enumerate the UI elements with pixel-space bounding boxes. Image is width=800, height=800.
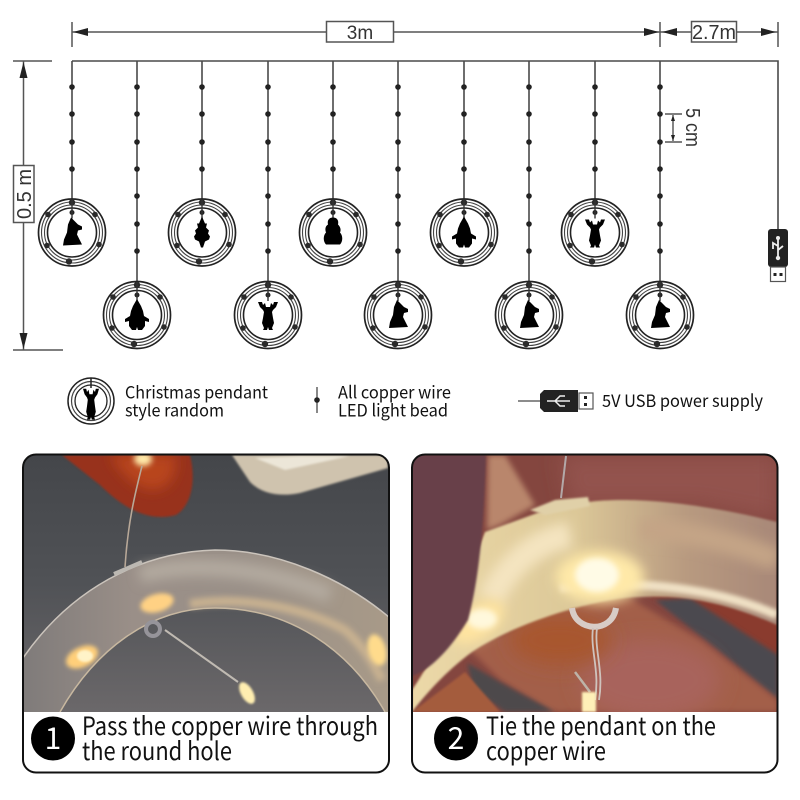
finger [62, 455, 193, 517]
step 1 caption [82, 707, 378, 768]
pendant: snowman [300, 199, 366, 266]
photo: tying pendant [411, 454, 780, 720]
dimension: 0.5 m height [13, 61, 63, 350]
photo: wire through hole [22, 452, 390, 712]
step 1 caption: the round hole [82, 732, 232, 768]
panel: step 2 [411, 454, 780, 772]
LEDs [556, 551, 644, 603]
step 2 caption: copper wire [486, 732, 606, 768]
wire curtain with LED beads [69, 61, 778, 282]
legend text: pendant [125, 378, 269, 422]
red band behind [656, 597, 776, 654]
panel: step 1 [22, 452, 390, 772]
step 2 caption [486, 707, 716, 768]
skin highlight [487, 455, 535, 530]
pendant: tree [168, 199, 236, 266]
wires [125, 466, 142, 567]
LEDs [63, 642, 100, 672]
dimension: 0.5 m height: 0.5 m [14, 169, 36, 219]
legend text: wire and bead: All copper wire [338, 378, 451, 404]
icon: usb [518, 390, 593, 412]
legend: pendant [68, 378, 269, 424]
dimension: 5 cm bead spacing [665, 108, 703, 147]
legend text: pendant: Christmas pendant [125, 378, 269, 404]
thumb [412, 455, 486, 676]
legend text: wire and bead [338, 378, 451, 422]
icon: wire with bead [314, 387, 320, 413]
step 1 caption: Pass the copper wire through [82, 707, 378, 743]
pendant: hat [364, 282, 432, 348]
pendant: reindeer [234, 282, 302, 348]
dimension: 3 m width [72, 22, 660, 47]
step 1 number badge: 1 [45, 714, 61, 758]
pendant row: lower [104, 282, 694, 348]
pendant: reindeer [562, 199, 628, 266]
step 2 caption: Tie the pendant on the [486, 707, 716, 743]
step 2 number badge [434, 714, 478, 760]
dark background patch [655, 598, 778, 700]
lower finger [470, 598, 778, 712]
tube [412, 500, 777, 712]
legend text: usb: 5V USB power supply [602, 387, 763, 412]
legend: wire and bead [314, 378, 451, 422]
pendant row: upper [38, 199, 628, 266]
pendant: hat [496, 282, 562, 348]
legend: usb [518, 387, 763, 412]
usb plug [768, 229, 788, 282]
step 1 number badge [31, 714, 75, 760]
pendant: hat [38, 199, 106, 266]
step 2 number badge: 2 [448, 714, 464, 758]
dimension: 2.7 m lead: 2.7m [692, 22, 736, 44]
panel frame [412, 454, 778, 772]
dimension: 2.7 m lead [660, 22, 778, 47]
pendant: santa [430, 199, 498, 266]
wire top [561, 456, 566, 498]
pendant: santa [104, 282, 170, 348]
tube [23, 550, 390, 712]
dimension: 5 cm bead spacing: 5 cm [681, 108, 703, 147]
panel frame [23, 454, 389, 772]
loop and wire [572, 608, 616, 627]
icon: pendant [68, 378, 114, 424]
dimension: 3 m width: 3m [347, 23, 373, 44]
legend text: pendant: style random [125, 396, 224, 422]
pendant: hat [626, 282, 694, 348]
box [232, 455, 388, 495]
legend text: wire and bead: LED light bead [338, 396, 448, 422]
